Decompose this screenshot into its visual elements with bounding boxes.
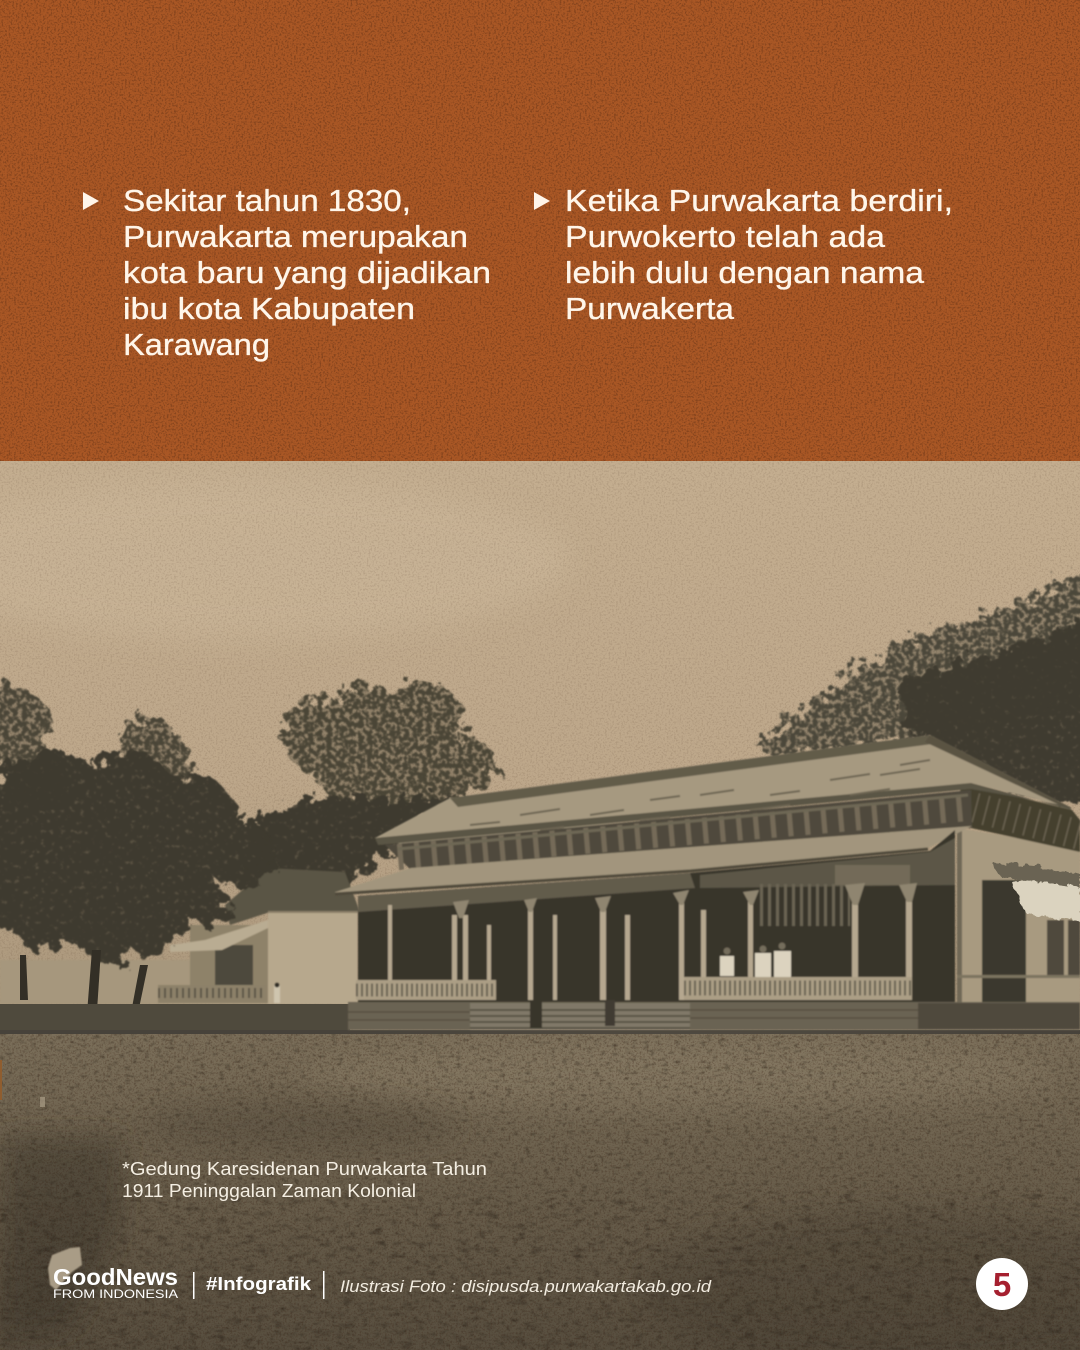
paragraph: Purwokerto: Purwokerto telah ada [565,219,886,254]
background tree centre [282,682,496,816]
main building [335,735,1080,1030]
right wing wall [957,828,1080,1005]
panel: brown text background [0,0,1080,461]
column capitals [453,883,917,918]
paragraph: Purwakarta 1830: ibu kota Kabupaten [123,291,415,326]
dark bushes behind building [250,795,455,900]
columns [388,883,917,1000]
paragraph: Purwakarta 1830: kota baru yang dijadikan [123,255,491,290]
frieze and interior [358,830,955,1003]
paragraph: Purwakarta 1830: Purwakarta merupakan [123,219,468,254]
sky [0,461,1080,1036]
balustrades [356,977,912,1000]
bullet text left [83,183,491,362]
footer photo credit: Ilustrasi Foto : disipusda.purwakartakab.go.id [340,1277,712,1296]
photo caption: 1911 Peninggalan Zaman Kolonial [122,1181,416,1201]
ground [0,1004,1080,1350]
background tree right [755,570,1080,810]
footer logo: GoodNews from Indonesia: GoodNews [53,1264,178,1290]
page number badge [976,1258,1028,1310]
icon: bullet triangle [534,192,550,210]
torn photo patch [992,862,1080,922]
photo caption [122,1159,487,1201]
clerestory band [385,790,972,870]
people on veranda [720,942,791,977]
paragraph: Purwakarta 1830: Karawang [123,327,270,362]
page number badge: 5 [993,1266,1011,1303]
footer logo: GoodNews from Indonesia: FROM INDONESIA [53,1287,178,1301]
photo caption: *Gedung Karesidenan Purwakarta Tahun [122,1159,487,1179]
paragraph: Purwakarta 1830: Sekitar tahun 1830, [123,183,411,218]
paragraph: Purwokerto [565,183,953,326]
side house [0,868,360,1004]
tree left [0,687,274,965]
icon: bullet triangle [83,192,99,210]
tree trunks [20,950,148,1004]
upper roof [375,735,1072,846]
plinth [348,1002,1080,1030]
photo: colonial residency building 1911 [0,461,1080,1350]
paragraph: Purwakarta 1830 [123,183,491,362]
paragraph: Purwokerto: Ketika Purwakarta berdiri, [565,183,953,218]
paragraph: Purwokerto: Purwakerta [565,291,735,326]
lower roof [335,826,972,894]
footer hashtag: #Infografik [206,1274,312,1294]
paragraph: Purwokerto: lebih dulu dengan nama [565,255,925,290]
footer logo: GoodNews from Indonesia [53,1264,178,1301]
bullet text right [534,183,953,326]
roof hatch marks [470,760,930,830]
